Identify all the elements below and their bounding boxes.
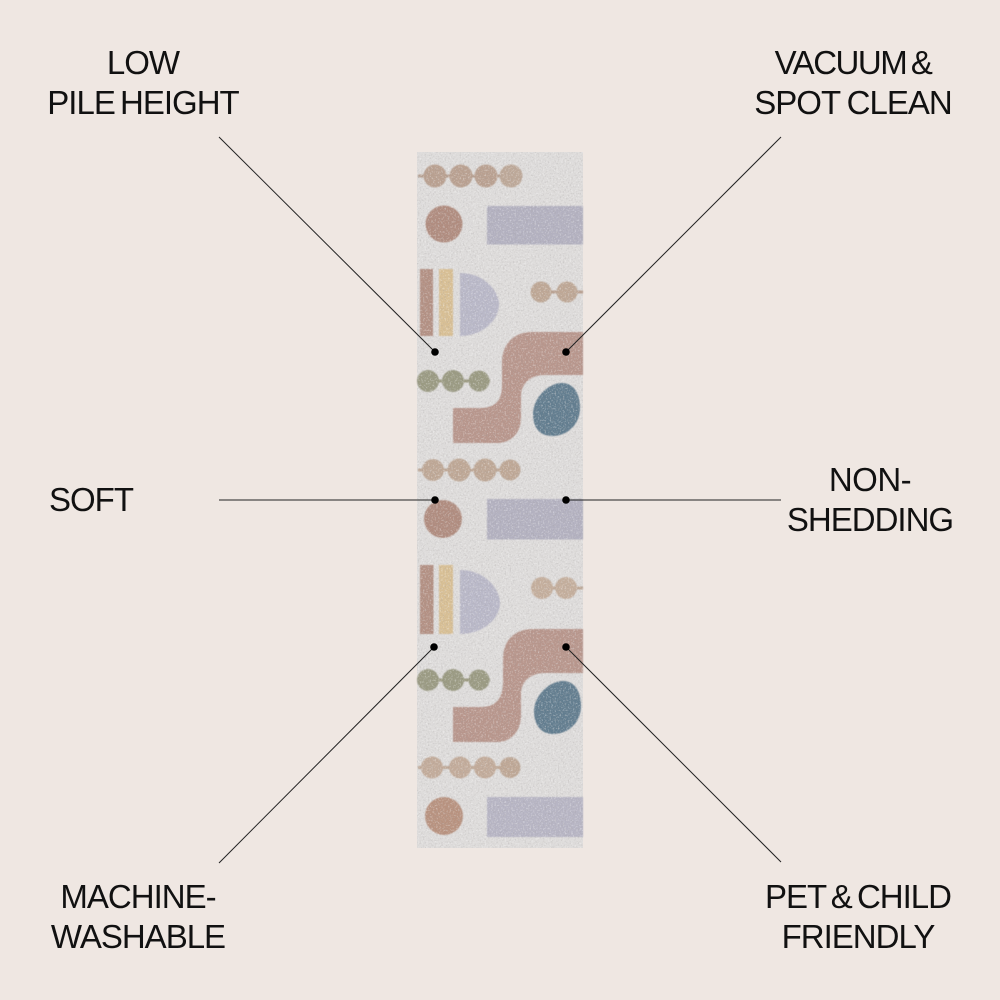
label: non-shedding: SHEDDING (787, 501, 953, 538)
label: low pile height (47, 44, 239, 121)
label: non-shedding (787, 461, 953, 538)
label: pet and child friendly: FRIENDLY (782, 918, 934, 955)
pattern: top section (418, 164, 583, 336)
label: vacuum and spot clean: VACUUM & (775, 44, 931, 81)
label: machine-washable (51, 878, 225, 955)
pattern: second S-shape, blob and beads (417, 629, 583, 778)
label: machine-washable: MACHINE- (60, 878, 216, 915)
pattern: first S-shape, blob and beads (417, 332, 583, 482)
label: pet and child friendly: PET & CHILD (765, 878, 951, 915)
label: low pile height: PILE HEIGHT (47, 84, 239, 121)
label: vacuum and spot clean: SPOT CLEAN (754, 84, 952, 121)
label: soft: SOFT (49, 481, 133, 518)
label: vacuum and spot clean (754, 44, 952, 121)
label: pet and child friendly (765, 878, 951, 955)
rug pile speckle: dark (417, 152, 583, 848)
label: non-shedding: NON- (829, 461, 911, 498)
label: machine-washable: WASHABLE (51, 918, 225, 955)
rug base (417, 152, 583, 848)
label: low pile height: LOW (107, 44, 179, 81)
rug pile speckle: light (417, 152, 583, 848)
pattern: middle section (420, 499, 583, 634)
pattern: bottom section (425, 797, 583, 837)
